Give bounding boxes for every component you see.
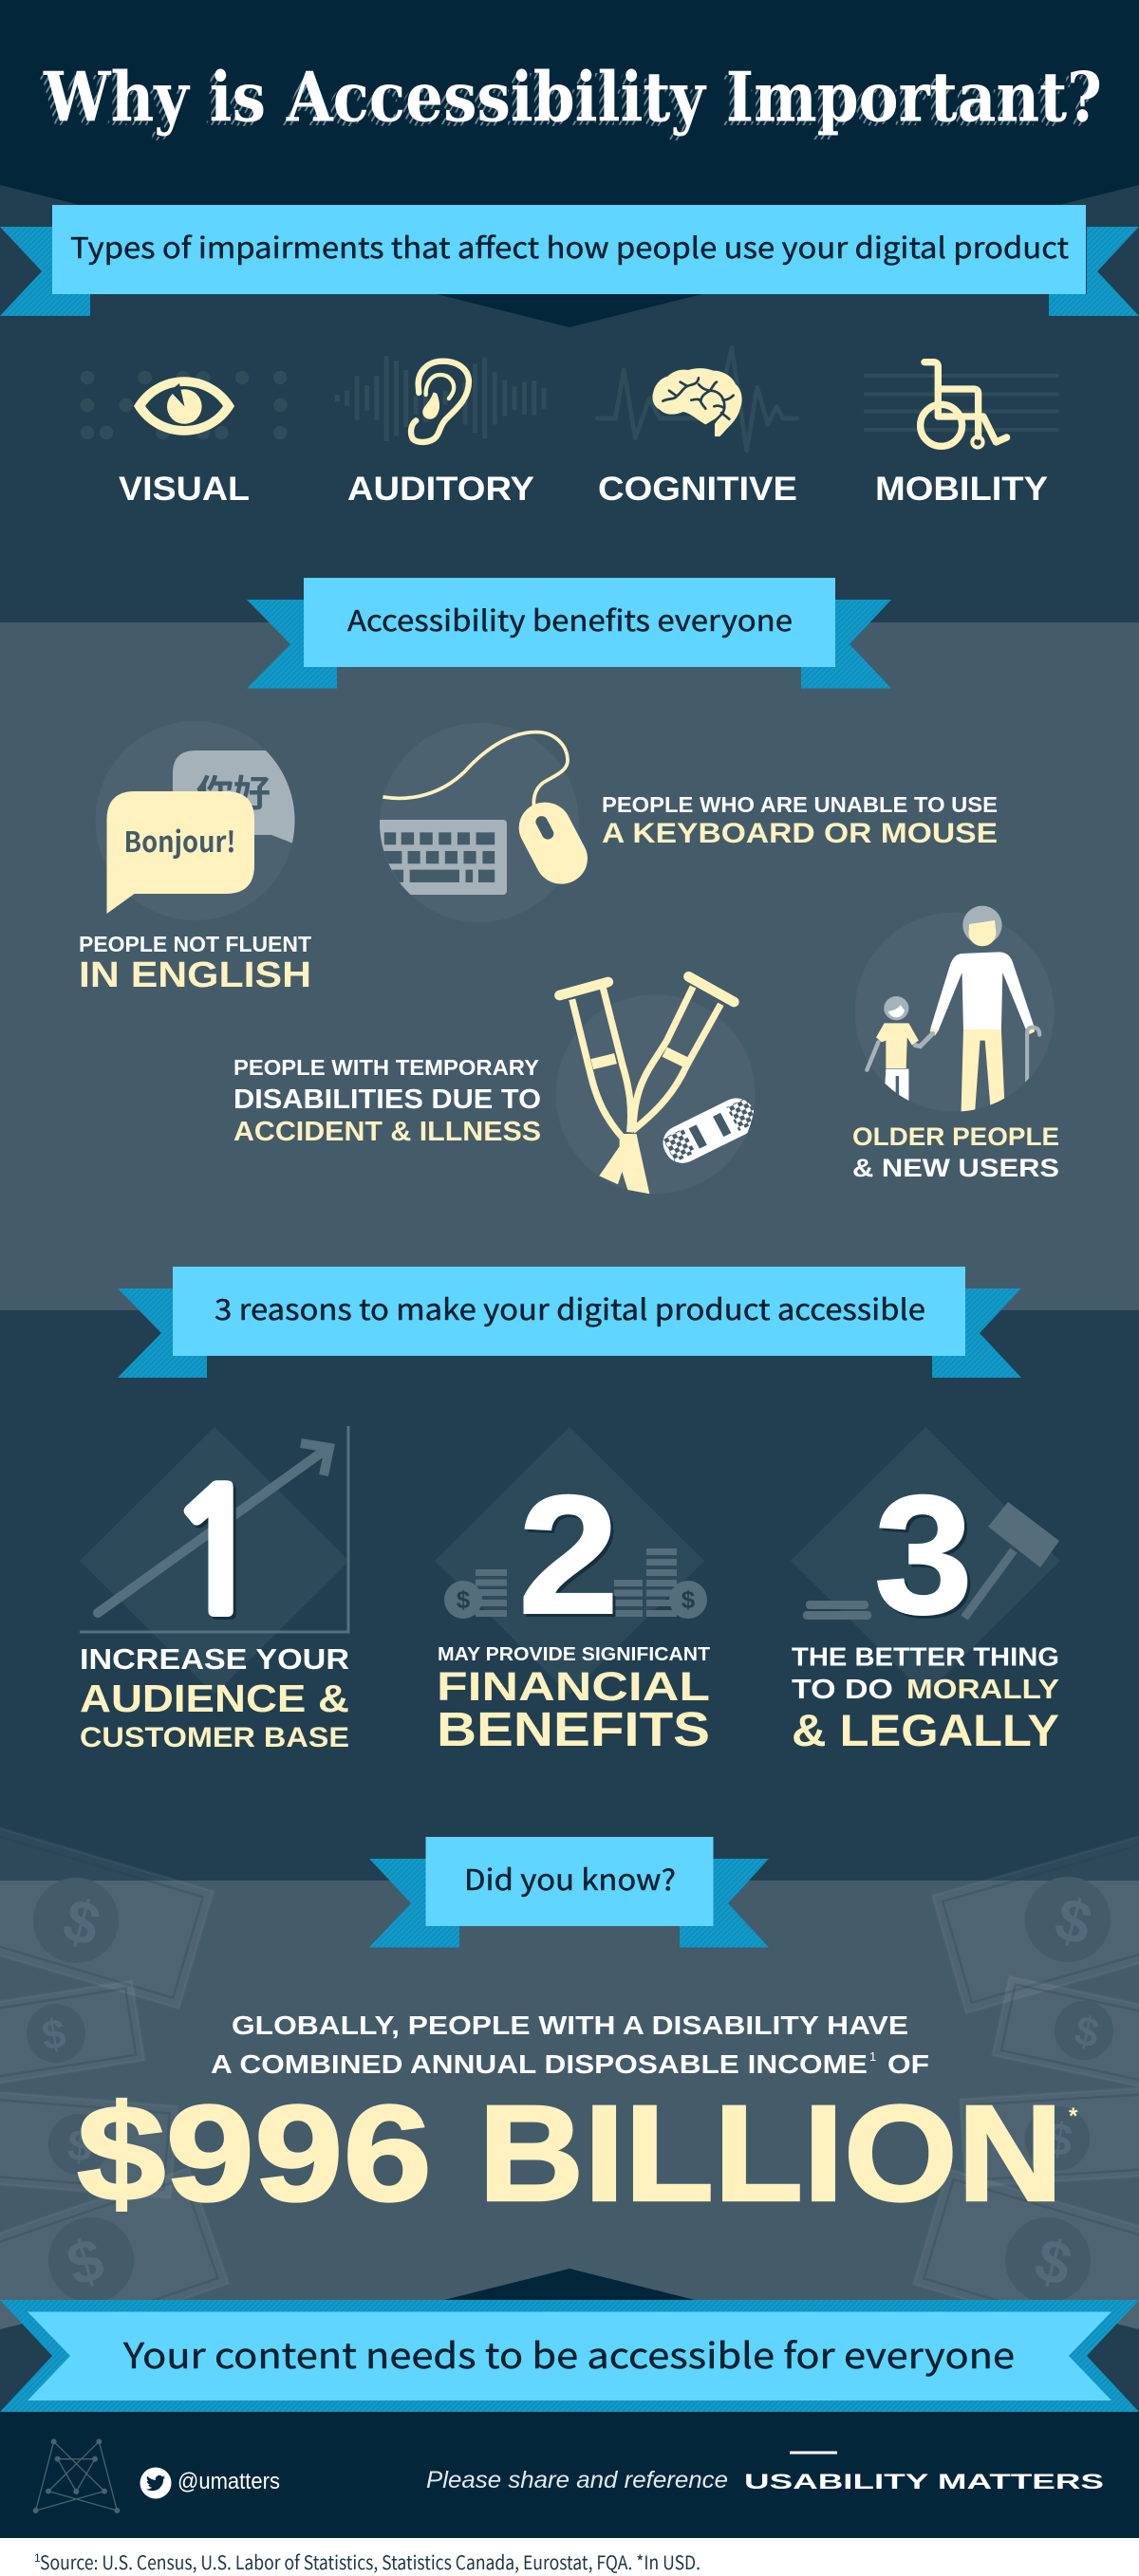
label: older people and new users: [852, 1122, 1059, 1182]
label: visual: VISUAL: [119, 471, 250, 508]
number 3: 3: [874, 1460, 973, 1649]
statistic: $996 billion: [77, 2077, 1078, 2230]
label: keyboard or mouse: PEOPLE WHO ARE UNABLE TO USE: [602, 792, 998, 817]
icon: gavel: [803, 1502, 1059, 1620]
icon: eye: [134, 377, 234, 436]
label: not fluent: IN ENGLISH: [79, 955, 311, 995]
icon: speech bubbles: 你好: [196, 765, 271, 818]
logo: network mark: [33, 2439, 120, 2512]
label: temporary disabilities: DISABILITIES DUE TO: [233, 1084, 541, 1115]
background: dollar bills: $: [1043, 2114, 1075, 2167]
icon: older person and child: [855, 906, 1055, 1113]
label: not fluent: PEOPLE NOT FLUENT: [79, 932, 311, 956]
ribbon: types of impairments: [0, 205, 1139, 316]
statistic intro text: A COMBINED ANNUAL DISPOSABLE INCOME: [211, 2049, 868, 2079]
ribbon: types of impairments: Types of impairments that affect how people use your digital product: [70, 225, 1069, 267]
background: dollar bills: $: [65, 2120, 94, 2171]
statistic intro text: [211, 2011, 929, 2079]
label: not fluent: [79, 932, 311, 995]
icon: speech bubbles: Bonjour!: [123, 819, 235, 861]
statistic: $996 billion: BILLION: [478, 2077, 1063, 2230]
icon: speech bubbles: [95, 721, 313, 920]
chart: growth arrow: [80, 1426, 348, 1632]
label: older people and new users: & NEW USERS: [852, 1154, 1059, 1182]
background: dollar bills: $: [1071, 2007, 1103, 2057]
panel: who benefits: [79, 721, 1059, 1194]
ribbon: your content: [0, 2300, 1139, 2412]
background: dollar bills: $: [60, 2224, 111, 2299]
ribbon: accessibility benefits everyone: [247, 578, 891, 689]
label: keyboard or mouse: [602, 792, 998, 849]
ribbon: 3 reasons: [118, 1267, 1021, 1378]
background: dollar bills: $: [1028, 2224, 1079, 2299]
reason 2 text: [437, 1644, 710, 1756]
icon: braille dots: [81, 371, 288, 439]
panel: reason 3: [791, 1427, 1060, 1755]
reason 3 text: THE BETTER THING: [792, 1641, 1059, 1672]
label: cognitive: COGNITIVE: [598, 471, 797, 508]
statistic: $996 billion: $996: [77, 2077, 432, 2230]
label: temporary disabilities: PEOPLE WITH TEMPORARY: [233, 1055, 539, 1080]
background: dollar bills: $: [1048, 1883, 1099, 1958]
statistic intro text: OF: [887, 2049, 929, 2079]
icon: brain: [652, 368, 742, 436]
ribbon: did you know: [369, 1837, 769, 1947]
source note: Source: U.S. Census, U.S. Labor of Statistics, Statistics Canada, Eurostat, FQA. *In USD.: [40, 2548, 700, 2575]
statistic intro text: 1: [869, 2049, 876, 2064]
icon: twitter: [140, 2467, 171, 2499]
icon: wheelchair: [921, 362, 1007, 448]
ribbon: accessibility benefits everyone: Accessibility benefits everyone: [347, 598, 793, 639]
reason 1 text: CUSTOMER BASE: [80, 1722, 349, 1753]
icon: coins: $: [457, 1585, 471, 1614]
statistic intro text: GLOBALLY, PEOPLE WITH A DISABILITY HAVE: [232, 2011, 908, 2040]
twitter handle: @umatters: [177, 2469, 280, 2494]
icon: sound wave: [335, 356, 547, 441]
reason 1 text: AUDIENCE &: [80, 1677, 349, 1720]
label: temporary disabilities: [233, 1055, 541, 1147]
icon: heartbeat line: [597, 348, 797, 451]
footer background with chevron: [0, 2269, 1139, 2538]
statistic: $996 billion: *: [1069, 2103, 1078, 2129]
panel: disposable income statistic: [77, 2011, 1078, 2230]
source note: 1: [34, 2551, 41, 2565]
background: dollar bills: $: [56, 1884, 108, 1959]
panel: impairment types: [81, 348, 1059, 508]
reason 2 text: BENEFITS: [437, 1702, 710, 1756]
share note: Please share and reference: [426, 2467, 728, 2493]
panel: reason 2: [435, 1427, 710, 1756]
icon: coins: $: [682, 1585, 696, 1614]
number 2: 2: [521, 1463, 622, 1652]
number 1: 1: [165, 1470, 269, 1639]
ribbon: 3 reasons: 3 reasons to make your digital product accessible: [215, 1287, 925, 1328]
reason 2 text: FINANCIAL: [437, 1664, 710, 1710]
reason 1 text: INCREASE YOUR: [80, 1642, 349, 1676]
label: temporary disabilities: ACCIDENT & ILLNESS: [233, 1117, 541, 1147]
reason 2 text: MAY PROVIDE SIGNIFICANT: [438, 1644, 710, 1665]
icon: coins: [444, 1548, 707, 1619]
label: keyboard or mouse: A KEYBOARD OR MOUSE: [602, 818, 998, 849]
label: older people and new users: OLDER PEOPLE: [852, 1122, 1059, 1151]
icon: ear: [411, 361, 469, 442]
reason 3 text: [792, 1641, 1059, 1755]
background: dollar bills: $: [39, 2011, 69, 2060]
label: mobility: MOBILITY: [875, 471, 1048, 508]
background: dollar bills: [0, 1810, 1139, 2376]
footer: [33, 2439, 1104, 2512]
source note: [0, 2538, 1139, 2576]
brand: USABILITY MATTERS: [744, 2470, 1104, 2493]
icon: crutches and bandage: [555, 976, 762, 1194]
icon: stave lines: [864, 376, 1059, 430]
icon: keyboard and mouse: [380, 723, 588, 922]
label: auditory: AUDITORY: [347, 471, 534, 508]
reason 3 text: TO DO: [792, 1675, 893, 1705]
ribbon: did you know: Did you know?: [464, 1857, 676, 1899]
reason 3 text: & LEGALLY: [792, 1705, 1059, 1755]
panel: reason 1: [80, 1426, 349, 1753]
reason 3 text: MORALLY: [906, 1675, 1059, 1705]
number 3: 3: [877, 1463, 976, 1652]
ribbon: your content: Your content needs to be accessible for everyone: [122, 2327, 1015, 2379]
reason 1 text: [80, 1642, 349, 1753]
number 2: 2: [518, 1460, 619, 1649]
number 1: 1: [168, 1473, 271, 1641]
